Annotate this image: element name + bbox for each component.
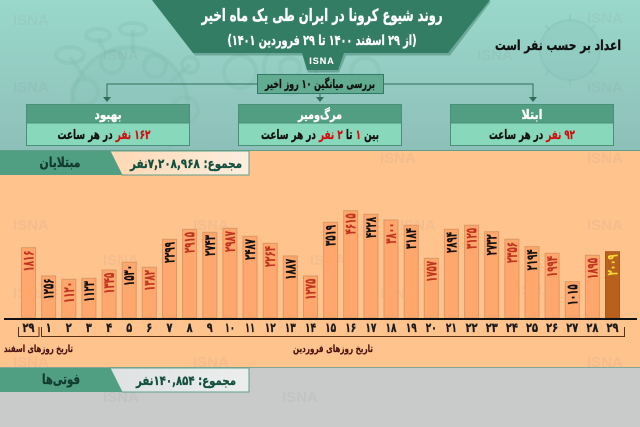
- heading: infections: ابتلا: [522, 108, 542, 123]
- chart axis line: [4, 318, 637, 320]
- heading: deaths: مرگ‌ومیر: [297, 106, 342, 123]
- watermark: ISNA repeated: ISNA: [13, 217, 49, 234]
- axis day labels: ۱۳: [285, 321, 296, 336]
- bar: day 18: ۳۸۰۰: [382, 223, 400, 244]
- bracket: Esfand days: [18, 327, 39, 336]
- watermark: ISNA repeated: ISNA: [587, 354, 623, 371]
- bar: day 10: ۲۹۸۷: [221, 231, 239, 252]
- icon: small virus watermark: [534, 14, 606, 86]
- axis day labels: ۲۹: [22, 321, 35, 336]
- bar: day 5: [120, 262, 138, 318]
- watermark: ISNA repeated: ISNA: [380, 150, 416, 167]
- bar: day 8: ۲۹۱۵: [181, 232, 199, 253]
- bar: day 28: [583, 255, 601, 318]
- axis day labels: ۱: [46, 321, 52, 336]
- axis day labels: ۲۲: [466, 321, 478, 336]
- bar: day 13: [281, 256, 299, 318]
- text: Farvardin dates label: تاریخ روزهای فروردین: [293, 344, 373, 355]
- bar: day 26: [543, 253, 561, 318]
- bar: day 15: ۳۵۱۹: [322, 225, 340, 246]
- bar: day 7: [160, 239, 178, 318]
- watermark: ISNA repeated: ISNA: [103, 389, 139, 406]
- bar: day 12: [261, 243, 279, 318]
- bar: day 3: [80, 278, 98, 318]
- watermark: ISNA repeated: ISNA: [400, 217, 436, 234]
- section bar: deaths total: [0, 367, 640, 392]
- watermark: ISNA repeated: ISNA: [587, 10, 623, 27]
- axis day labels: ۱۸: [386, 321, 397, 336]
- bar: day 24: [503, 239, 521, 318]
- axis day labels: ۲۳: [486, 321, 498, 336]
- axis day labels: ۲: [66, 321, 72, 336]
- text: deaths total: مجموع: ۱۴۰,۸۵۴نفر: [135, 374, 236, 389]
- axis day labels: ۲۶: [546, 321, 558, 336]
- axis day labels: ۳: [86, 321, 92, 336]
- bar: day 21: ۲۸۹۴: [442, 232, 460, 253]
- bar: day 19: [402, 225, 420, 318]
- bar: day 10: [221, 228, 239, 318]
- bar: day 11: [241, 236, 259, 318]
- bar: day 8: [181, 229, 199, 318]
- bar: day 13: ۱۸۸۷: [281, 259, 299, 280]
- bar: day 22: [463, 225, 481, 318]
- text: deaths rate: بین ۱ تا ۲ نفر در هر ساعت: [261, 128, 379, 143]
- watermark: ISNA repeated: ISNA: [310, 252, 346, 269]
- bar: day 17: ۴۲۲۸: [362, 217, 380, 238]
- bar: day 27: ۱۰۱۵: [563, 284, 581, 305]
- watermark: ISNA repeated: ISNA: [380, 285, 416, 302]
- connector arrows: [103, 84, 537, 102]
- heading: infected: مبتلایان: [40, 155, 80, 171]
- callout: 10-day average: [258, 74, 384, 94]
- watermark: ISNA repeated: ISNA: [13, 12, 49, 29]
- header: title banner: [152, 0, 491, 72]
- bar: day 15: [322, 222, 340, 318]
- watermark: ISNA repeated: ISNA: [587, 217, 623, 234]
- watermark: ISNA repeated: ISNA: [477, 47, 513, 64]
- bar: day 7: ۲۲۹۹: [160, 242, 178, 263]
- axis day labels: ۲۵: [526, 321, 538, 336]
- watermark: ISNA repeated: ISNA: [193, 217, 229, 234]
- axis day labels: ۴: [106, 321, 112, 336]
- watermark: ISNA repeated: ISNA: [13, 79, 49, 96]
- logo text: ISNA: ISNA: [309, 56, 335, 66]
- axis day labels: ۷: [166, 321, 173, 336]
- panel: chart orange background: [0, 150, 640, 368]
- panel: infections rate: [450, 104, 614, 146]
- text: Esfand dates label: تاریخ روزهای اسفند: [4, 344, 73, 355]
- bar: day 11: ۲۴۸۷: [241, 239, 259, 260]
- axis day labels: ۲۴: [506, 321, 518, 336]
- bar: day 18: [382, 220, 400, 318]
- axis day labels: ۵: [126, 321, 132, 336]
- watermark: ISNA repeated: ISNA: [13, 285, 49, 302]
- axis day labels: ۱۹: [406, 321, 417, 336]
- axis day labels: ۲۷: [566, 321, 578, 336]
- section bar: infected total: [0, 150, 640, 175]
- bar: day 4: [100, 270, 118, 318]
- panel: recovery: [26, 104, 190, 146]
- watermark: ISNA repeated: ISNA: [282, 389, 318, 406]
- axis day labels: ۱۶: [345, 321, 356, 336]
- text: infected total: مجموع: ۷,۲۰۸,۹۶۸نفر: [129, 157, 242, 172]
- bar: 29 Esfand: [20, 248, 38, 318]
- bar: day 29 highlighted: [604, 252, 622, 318]
- axis day labels: ۲۰: [426, 321, 437, 336]
- heading: recovery: بهبود: [94, 108, 122, 123]
- bar: day 28: ۱۸۹۵: [583, 258, 601, 279]
- panel: deaths grey background: [0, 367, 640, 427]
- axis day labels: [22, 321, 619, 336]
- watermark: ISNA repeated: ISNA: [103, 47, 139, 64]
- bar: day 9: ۲۷۴۳: [201, 235, 219, 256]
- axis day labels: ۸: [187, 321, 193, 336]
- watermark: ISNA repeated: ISNA: [587, 150, 623, 167]
- bar: day 16: ۴۶۱۵: [342, 213, 360, 234]
- axis day labels: ۱۲: [265, 321, 276, 336]
- bracket: Farvardin days: [42, 327, 624, 336]
- panel: top teal background: [0, 0, 640, 151]
- bar: day 14: ۱۲۷۵: [302, 279, 320, 300]
- axis day labels: ۶: [146, 321, 152, 336]
- callout: 10-day average: بررسی میانگین ۱۰ روز اخیر: [264, 77, 375, 92]
- bar: day 17: [362, 214, 380, 318]
- axis day labels: ۱۱: [245, 321, 255, 336]
- bar: day 25: ۲۱۹۴: [523, 249, 541, 270]
- bar: day 9: [201, 232, 219, 318]
- axis day labels: ۱۴: [305, 321, 316, 336]
- bar: 29 Esfand: ۱۸۱۶: [20, 250, 38, 272]
- bar: day 21: [442, 229, 460, 318]
- bar: day 19: ۳۱۸۴: [402, 228, 420, 249]
- axis day labels: ۱۵: [325, 321, 336, 336]
- watermark: ISNA repeated: ISNA: [193, 354, 229, 371]
- icon: large virus watermark: [56, 23, 379, 163]
- subtitle: (از ۲۹ اسفند ۱۴۰۰ تا ۲۹ فروردین ۱۴۰۱): [228, 33, 416, 49]
- text: infections rate: ۹۲ نفر در هر ساعت: [489, 128, 575, 143]
- axis day labels: ۱۰: [225, 321, 235, 336]
- bar: day 22: ۳۱۲۵: [463, 228, 481, 249]
- bar: day 26: ۱۹۹۴: [543, 256, 561, 277]
- heading: deaths: فوتی‌ها: [42, 372, 80, 388]
- panel: deaths rate: [238, 104, 402, 146]
- title: روند شیوع کرونا در ایران طی یک ماه اخیر: [201, 6, 442, 26]
- watermark: ISNA repeated: ISNA: [13, 354, 49, 371]
- bar: day 24: ۲۳۵۶: [503, 242, 521, 263]
- bar chart: daily infections: [20, 211, 622, 318]
- bar: day 27: [563, 282, 581, 318]
- bar: day 20: [422, 258, 440, 318]
- bar: day 16: [342, 211, 360, 318]
- bar: day 2: ۱۱۲۰: [60, 282, 78, 303]
- bar: day 12: ۲۲۶۴: [261, 246, 279, 267]
- text: recovery rate: ۱۶۲ نفر در هر ساعت: [58, 128, 151, 143]
- bar: day 6: ۱۳۸۲: [140, 270, 158, 291]
- axis day labels: ۲۸: [586, 321, 598, 336]
- bar: day 25: [523, 247, 541, 318]
- bar: day 29 highlighted: ۲۰۰۹: [604, 254, 622, 275]
- bar: day 4: ۱۳۴۵: [100, 273, 118, 294]
- bar: day 14: [302, 276, 320, 318]
- axis day labels: ۲۱: [446, 321, 457, 336]
- watermark: ISNA repeated: ISNA: [173, 150, 209, 167]
- bar: day 1: [40, 276, 58, 318]
- bar: day 23: ۲۷۳۲: [483, 234, 501, 255]
- bar: day 5: ۱۵۳۰: [120, 265, 138, 286]
- bar: day 23: [483, 232, 501, 318]
- watermark: ISNA repeated: ISNA: [587, 79, 623, 96]
- bar: day 20: ۱۷۵۷: [422, 261, 440, 282]
- bar: day 3: ۱۱۲۳: [80, 281, 98, 302]
- axis day labels: ۱۷: [365, 321, 376, 336]
- axis day labels: ۹: [207, 321, 213, 336]
- bar: day 6: [140, 267, 158, 318]
- bar: day 2: [60, 279, 78, 318]
- axis day labels: ۲۹: [606, 321, 619, 336]
- watermark: ISNA repeated: ISNA: [103, 252, 139, 269]
- bar: day 1: ۱۲۵۶: [40, 278, 58, 300]
- watermark: ISNA repeated: ISNA: [517, 282, 553, 299]
